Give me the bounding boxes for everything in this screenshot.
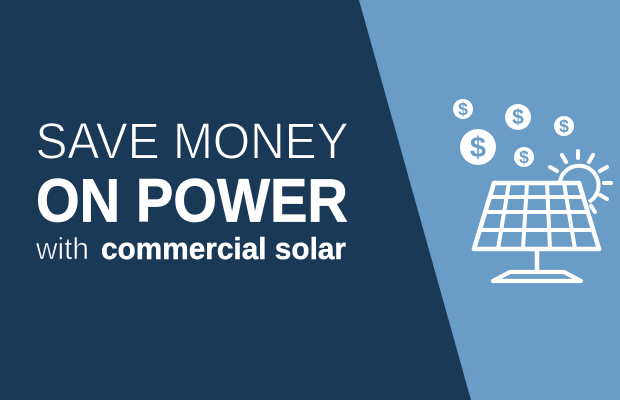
icon: coins: [453, 99, 574, 167]
subtitle: commercial solar: commercial solar: [101, 232, 346, 266]
coin: $: [458, 99, 468, 119]
coin: $: [470, 132, 486, 164]
coin: $: [559, 116, 569, 136]
coin: $: [512, 106, 524, 129]
title line: on power: ON POWER: [36, 166, 348, 236]
icon: sun: [550, 151, 611, 212]
coin: $: [519, 147, 529, 167]
title: [35, 112, 349, 266]
panel: dark diagonal: [0, 0, 471, 400]
icon: solar panel: [474, 183, 599, 281]
subtitle: with: with: [35, 231, 89, 266]
title line: save money: SAVE MONEY: [36, 112, 348, 170]
